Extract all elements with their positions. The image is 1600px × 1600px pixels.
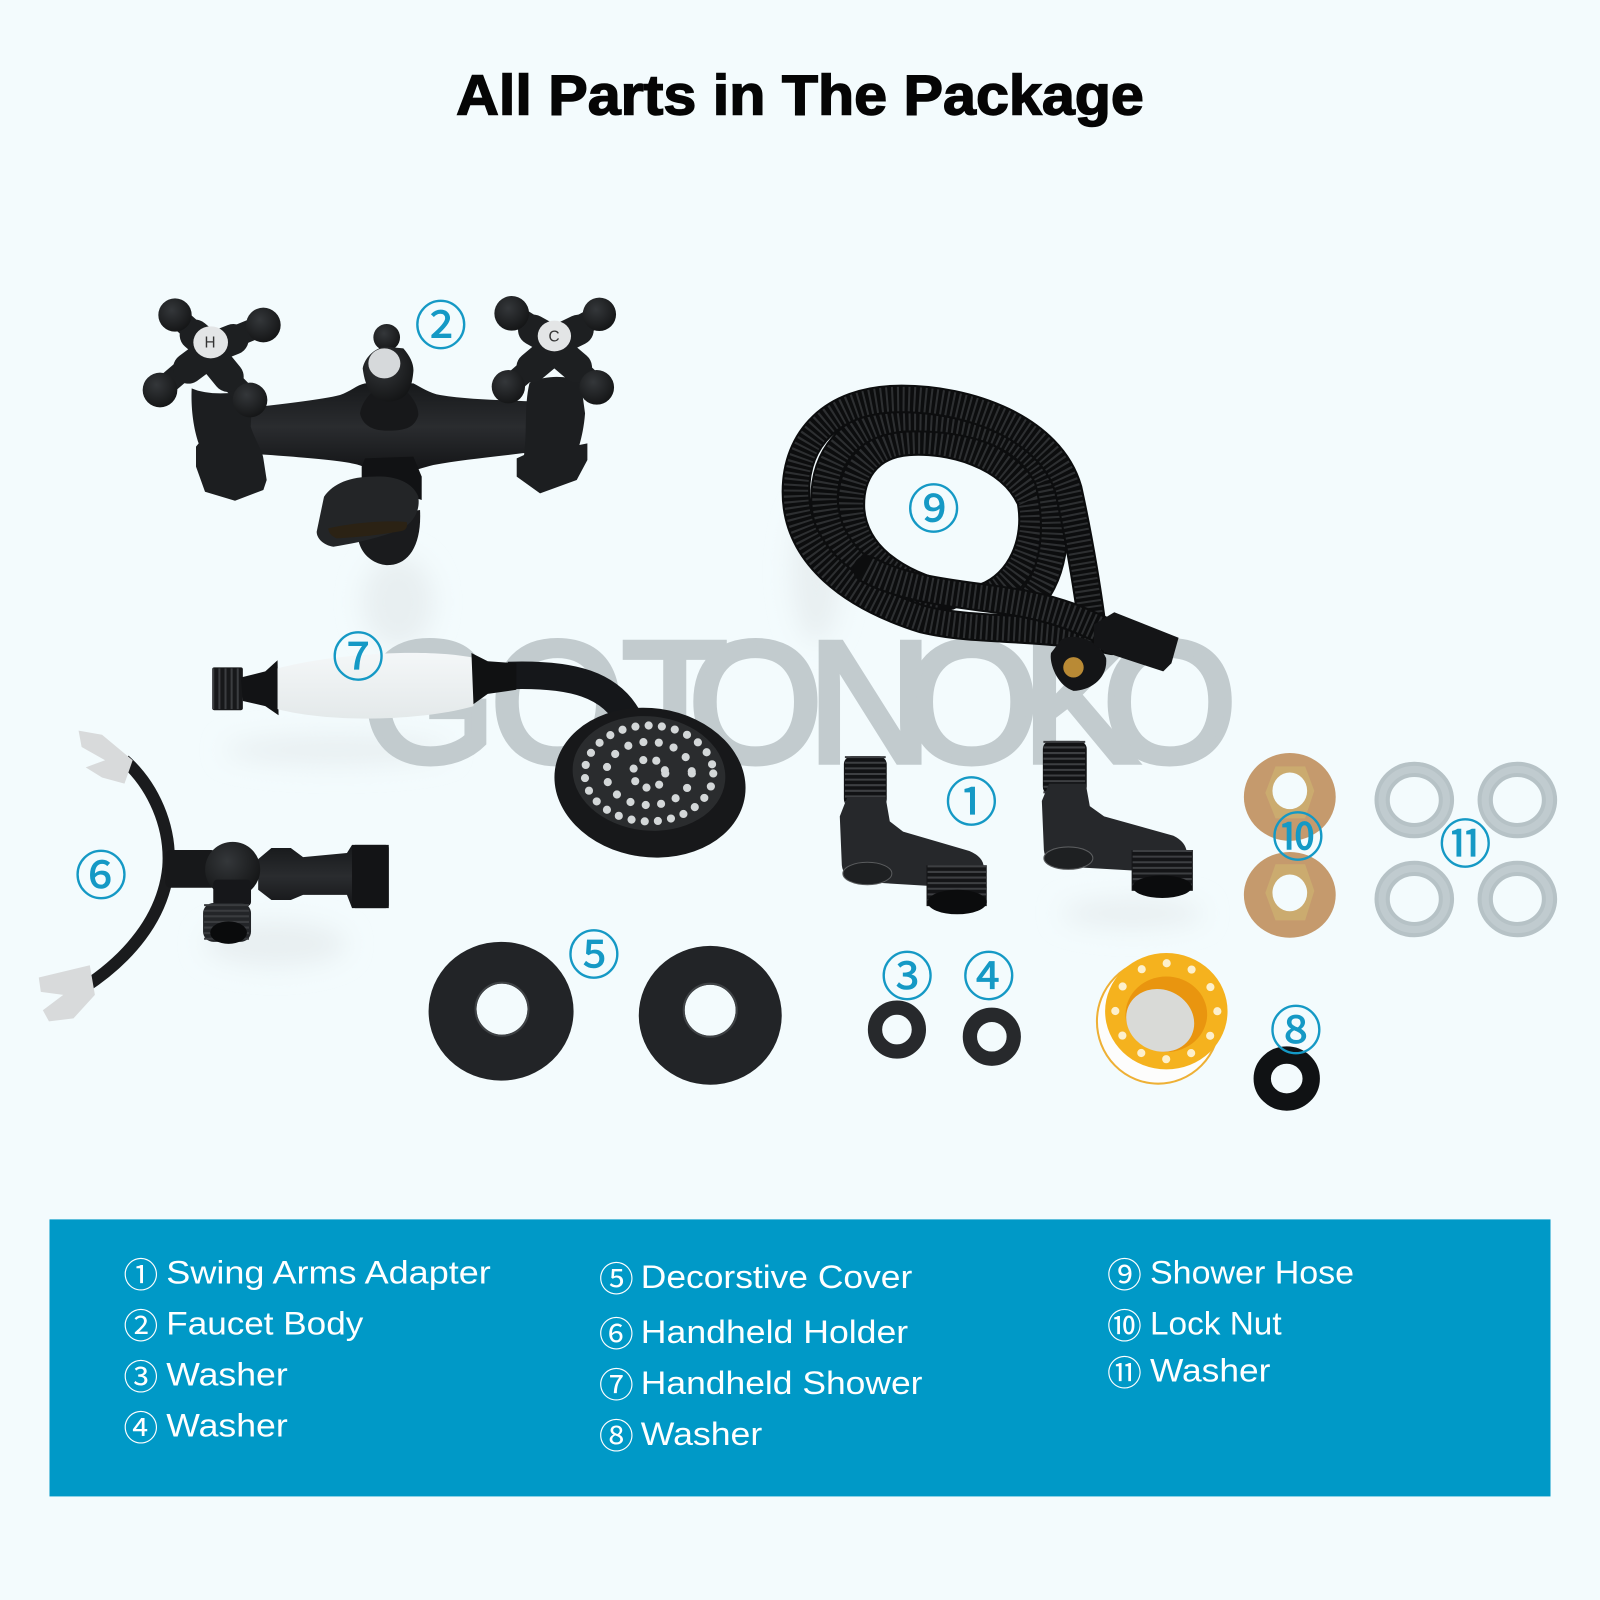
legend column 2: ⑥ bbox=[599, 1307, 634, 1357]
part 10: lock nuts bbox=[1244, 753, 1336, 938]
legend column 1: Swing Arms Adapter bbox=[166, 1254, 491, 1291]
callout 10: ⑩ bbox=[1272, 810, 1324, 868]
legend column 1: ② bbox=[123, 1298, 158, 1348]
threaded end bbox=[212, 660, 279, 715]
strap bbox=[84, 760, 169, 988]
legend column 3: Lock Nut bbox=[1150, 1305, 1282, 1342]
neck bbox=[471, 653, 516, 704]
right cross handle: C bbox=[549, 328, 560, 345]
legend column 1: ① bbox=[123, 1247, 158, 1297]
left cover bbox=[429, 942, 574, 1081]
callout numbers bbox=[75, 299, 1491, 1062]
callout 7: ⑦ bbox=[332, 630, 384, 688]
part 5: decorative covers bbox=[429, 942, 782, 1085]
legend column 1: Washer bbox=[166, 1407, 288, 1444]
top lock nut bbox=[1244, 753, 1336, 841]
legend column 1: ③ bbox=[123, 1349, 158, 1399]
left cross handle: H bbox=[204, 334, 216, 351]
callout 2: ② bbox=[415, 299, 467, 357]
part 4: washer bbox=[970, 1015, 1014, 1059]
top clip bbox=[79, 731, 133, 784]
legend column 3 bbox=[1107, 1247, 1354, 1395]
legend column 2: Handheld Holder bbox=[641, 1313, 908, 1350]
callout 8: ⑧ bbox=[1270, 1004, 1322, 1062]
legend column 2: ⑦ bbox=[599, 1358, 634, 1408]
arm bbox=[508, 675, 631, 722]
part 3: washer bbox=[875, 1008, 919, 1052]
legend column 1: ④ bbox=[123, 1401, 158, 1451]
bottom clip bbox=[39, 965, 95, 1021]
part 11: clear washers bbox=[1382, 769, 1549, 930]
watermark: GOTONOKO bbox=[362, 607, 1236, 798]
part 2: faucet body bbox=[143, 296, 616, 565]
callout 4: ④ bbox=[963, 950, 1015, 1008]
holder body bbox=[165, 842, 389, 944]
hose collar bbox=[1094, 612, 1179, 671]
legend column 2 bbox=[599, 1252, 923, 1459]
left cross handle bbox=[143, 298, 281, 417]
legend column 2: Washer bbox=[641, 1415, 762, 1452]
bottom lock nut bbox=[1244, 852, 1336, 938]
soft shadows bbox=[204, 500, 1204, 966]
callout 11: ⑪ bbox=[1439, 817, 1491, 875]
faucet main body bbox=[247, 383, 540, 470]
part 8: washer bbox=[1262, 1055, 1311, 1102]
panel: parts legend bbox=[49, 1219, 1551, 1496]
legend column 3: ⑪ bbox=[1107, 1345, 1142, 1395]
legend column 2: ⑤ bbox=[599, 1252, 634, 1302]
hose end nut bbox=[1051, 637, 1106, 691]
hose coils bbox=[796, 399, 1112, 641]
right cross handle bbox=[492, 296, 616, 405]
callout 5: ⑤ bbox=[568, 928, 620, 986]
thread seal tape bbox=[1097, 953, 1228, 1084]
left valve bbox=[191, 388, 267, 501]
legend column 3: ⑩ bbox=[1107, 1298, 1142, 1348]
right valve bbox=[517, 377, 587, 493]
left adapter bbox=[840, 756, 987, 914]
right cover bbox=[639, 946, 782, 1085]
legend column 2: Handheld Shower bbox=[641, 1364, 923, 1401]
legend column 1: Faucet Body bbox=[166, 1305, 364, 1342]
legend column 3: Shower Hose bbox=[1150, 1254, 1354, 1291]
shower head bbox=[545, 696, 755, 870]
legend column 3: Washer bbox=[1150, 1352, 1271, 1389]
title: All Parts in The Package bbox=[456, 63, 1144, 126]
ceramic handle bbox=[278, 653, 476, 719]
legend column 1: Washer bbox=[166, 1356, 288, 1393]
center diverter bbox=[360, 324, 418, 431]
part 1: swing arm adapters bbox=[840, 741, 1193, 914]
part 6: handheld holder bbox=[39, 731, 389, 1021]
legend column 2: Decorstive Cover bbox=[641, 1258, 912, 1295]
callout 1: ① bbox=[945, 775, 997, 833]
part 9: shower hose bbox=[796, 399, 1179, 691]
callout 6: ⑥ bbox=[75, 849, 127, 907]
spout bbox=[317, 457, 422, 565]
legend column 1 bbox=[123, 1247, 491, 1451]
part 7: handheld shower bbox=[212, 653, 755, 870]
legend column 3: ⑨ bbox=[1107, 1247, 1142, 1297]
callout 9: ⑨ bbox=[908, 482, 960, 540]
legend column 2: ⑧ bbox=[599, 1409, 634, 1459]
callout 3: ③ bbox=[881, 950, 933, 1008]
right adapter bbox=[1042, 741, 1193, 898]
